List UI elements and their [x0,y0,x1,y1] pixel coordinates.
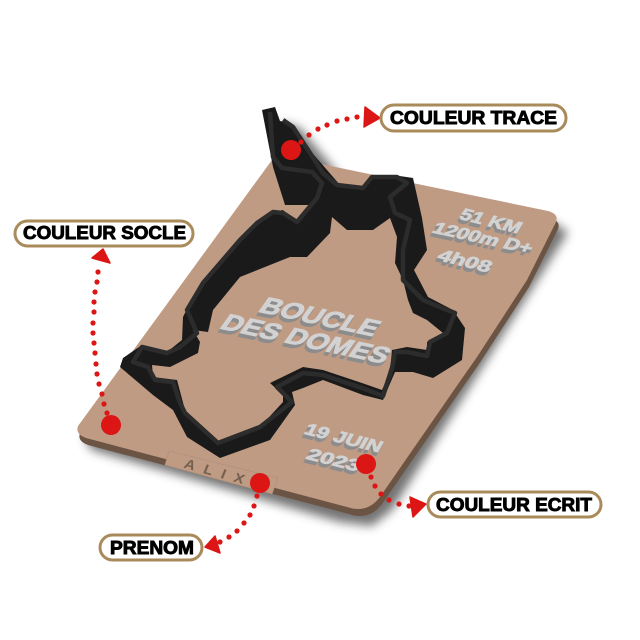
plate top surface [77,156,557,509]
label: couleur socle: COULEUR SOCLE [23,223,186,243]
label: prenom [100,535,202,560]
event date [301,421,386,475]
label: couleur trace [381,105,566,131]
trace top face [133,112,455,443]
name text: ALIX [182,457,255,490]
route trace [120,107,465,458]
event date: 2023 [303,446,364,475]
distance, elevation and time: 4h08 [434,247,496,277]
name tab [165,451,278,494]
label: couleur ecrit: COULEUR ECRIT [436,495,592,515]
callout: prenom [205,473,270,553]
label: prenom: PRENOM [110,538,194,558]
distance, elevation and time: 51 KM [456,206,526,237]
event date: 19 JUIN [301,421,386,456]
callout: couleur socle [90,249,121,435]
callout: couleur ecrit [356,454,426,517]
distance, elevation and time [429,206,537,277]
distance, elevation and time: 1200m D+ [429,220,537,258]
label: couleur ecrit [428,492,601,517]
plate shadow [85,122,568,526]
plate base [77,156,559,516]
event title: BOUCLE [254,293,386,341]
label: couleur trace: COULEUR TRACE [390,108,557,128]
callout: couleur trace [281,107,380,160]
plate side [79,163,559,516]
event title: DES DOMES [215,309,397,368]
